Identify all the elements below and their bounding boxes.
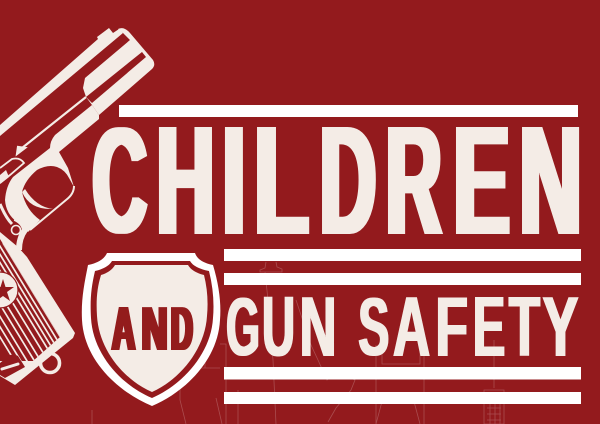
icon: pistol — [0, 28, 154, 385]
subtitle: GUN SAFETY: A — [393, 278, 430, 374]
label: AND: N — [142, 294, 167, 363]
faint outline figures — [92, 262, 504, 424]
pistol top rib and front sight — [0, 28, 123, 136]
pistol slide — [83, 28, 154, 115]
title: CHILDREN: L — [254, 93, 309, 267]
shield ring — [91, 261, 214, 398]
subtitle: GUN SAFETY: E — [473, 279, 505, 374]
subtitle: GUN SAFETY: S — [358, 281, 389, 374]
title: CHILDREN: R — [386, 95, 442, 268]
slide slot — [86, 52, 146, 103]
title: CHILDREN: C — [92, 97, 147, 265]
subtitle: GUN SAFETY: Y — [542, 279, 579, 375]
grip panel with stripes — [0, 239, 60, 361]
shield badge — [82, 253, 220, 406]
shield outer — [82, 253, 220, 406]
title: CHILDREN: D — [320, 95, 376, 268]
lanyard ring — [40, 354, 60, 372]
grip base slot — [0, 355, 25, 378]
base pill — [2, 364, 18, 369]
subtitle: GUN SAFETY: F — [435, 279, 468, 375]
trigger — [22, 189, 53, 209]
title: CHILDREN: E — [453, 94, 510, 268]
subtitle: GUN SAFETY: N — [300, 278, 336, 374]
shield inner — [97, 265, 208, 392]
screw ring — [12, 226, 20, 234]
label: AND: A — [112, 293, 135, 364]
top bar — [119, 105, 578, 117]
label: AND — [112, 293, 193, 364]
subtitle: GUN SAFETY: T — [509, 278, 540, 374]
trigger guard — [30, 186, 74, 230]
subtitle: GUN SAFETY: G — [226, 281, 260, 374]
grip medallion with star — [0, 272, 18, 308]
stripes above subtitle — [224, 249, 581, 285]
grip neck — [15, 218, 25, 250]
subtitle: GUN SAFETY: U — [262, 279, 295, 374]
stripes below subtitle — [224, 367, 581, 404]
slide stop loop — [0, 158, 24, 183]
grip — [0, 232, 75, 385]
subtitle: GUN SAFETY — [226, 278, 579, 375]
label: AND: D — [171, 295, 193, 364]
title: CHILDREN: H — [157, 94, 214, 268]
thin rail — [17, 97, 86, 154]
title: CHILDREN: N — [519, 93, 582, 267]
title: CHILDREN — [92, 93, 582, 268]
title: CHILDREN: I — [222, 94, 245, 268]
frame and lower barrel band — [5, 105, 99, 232]
